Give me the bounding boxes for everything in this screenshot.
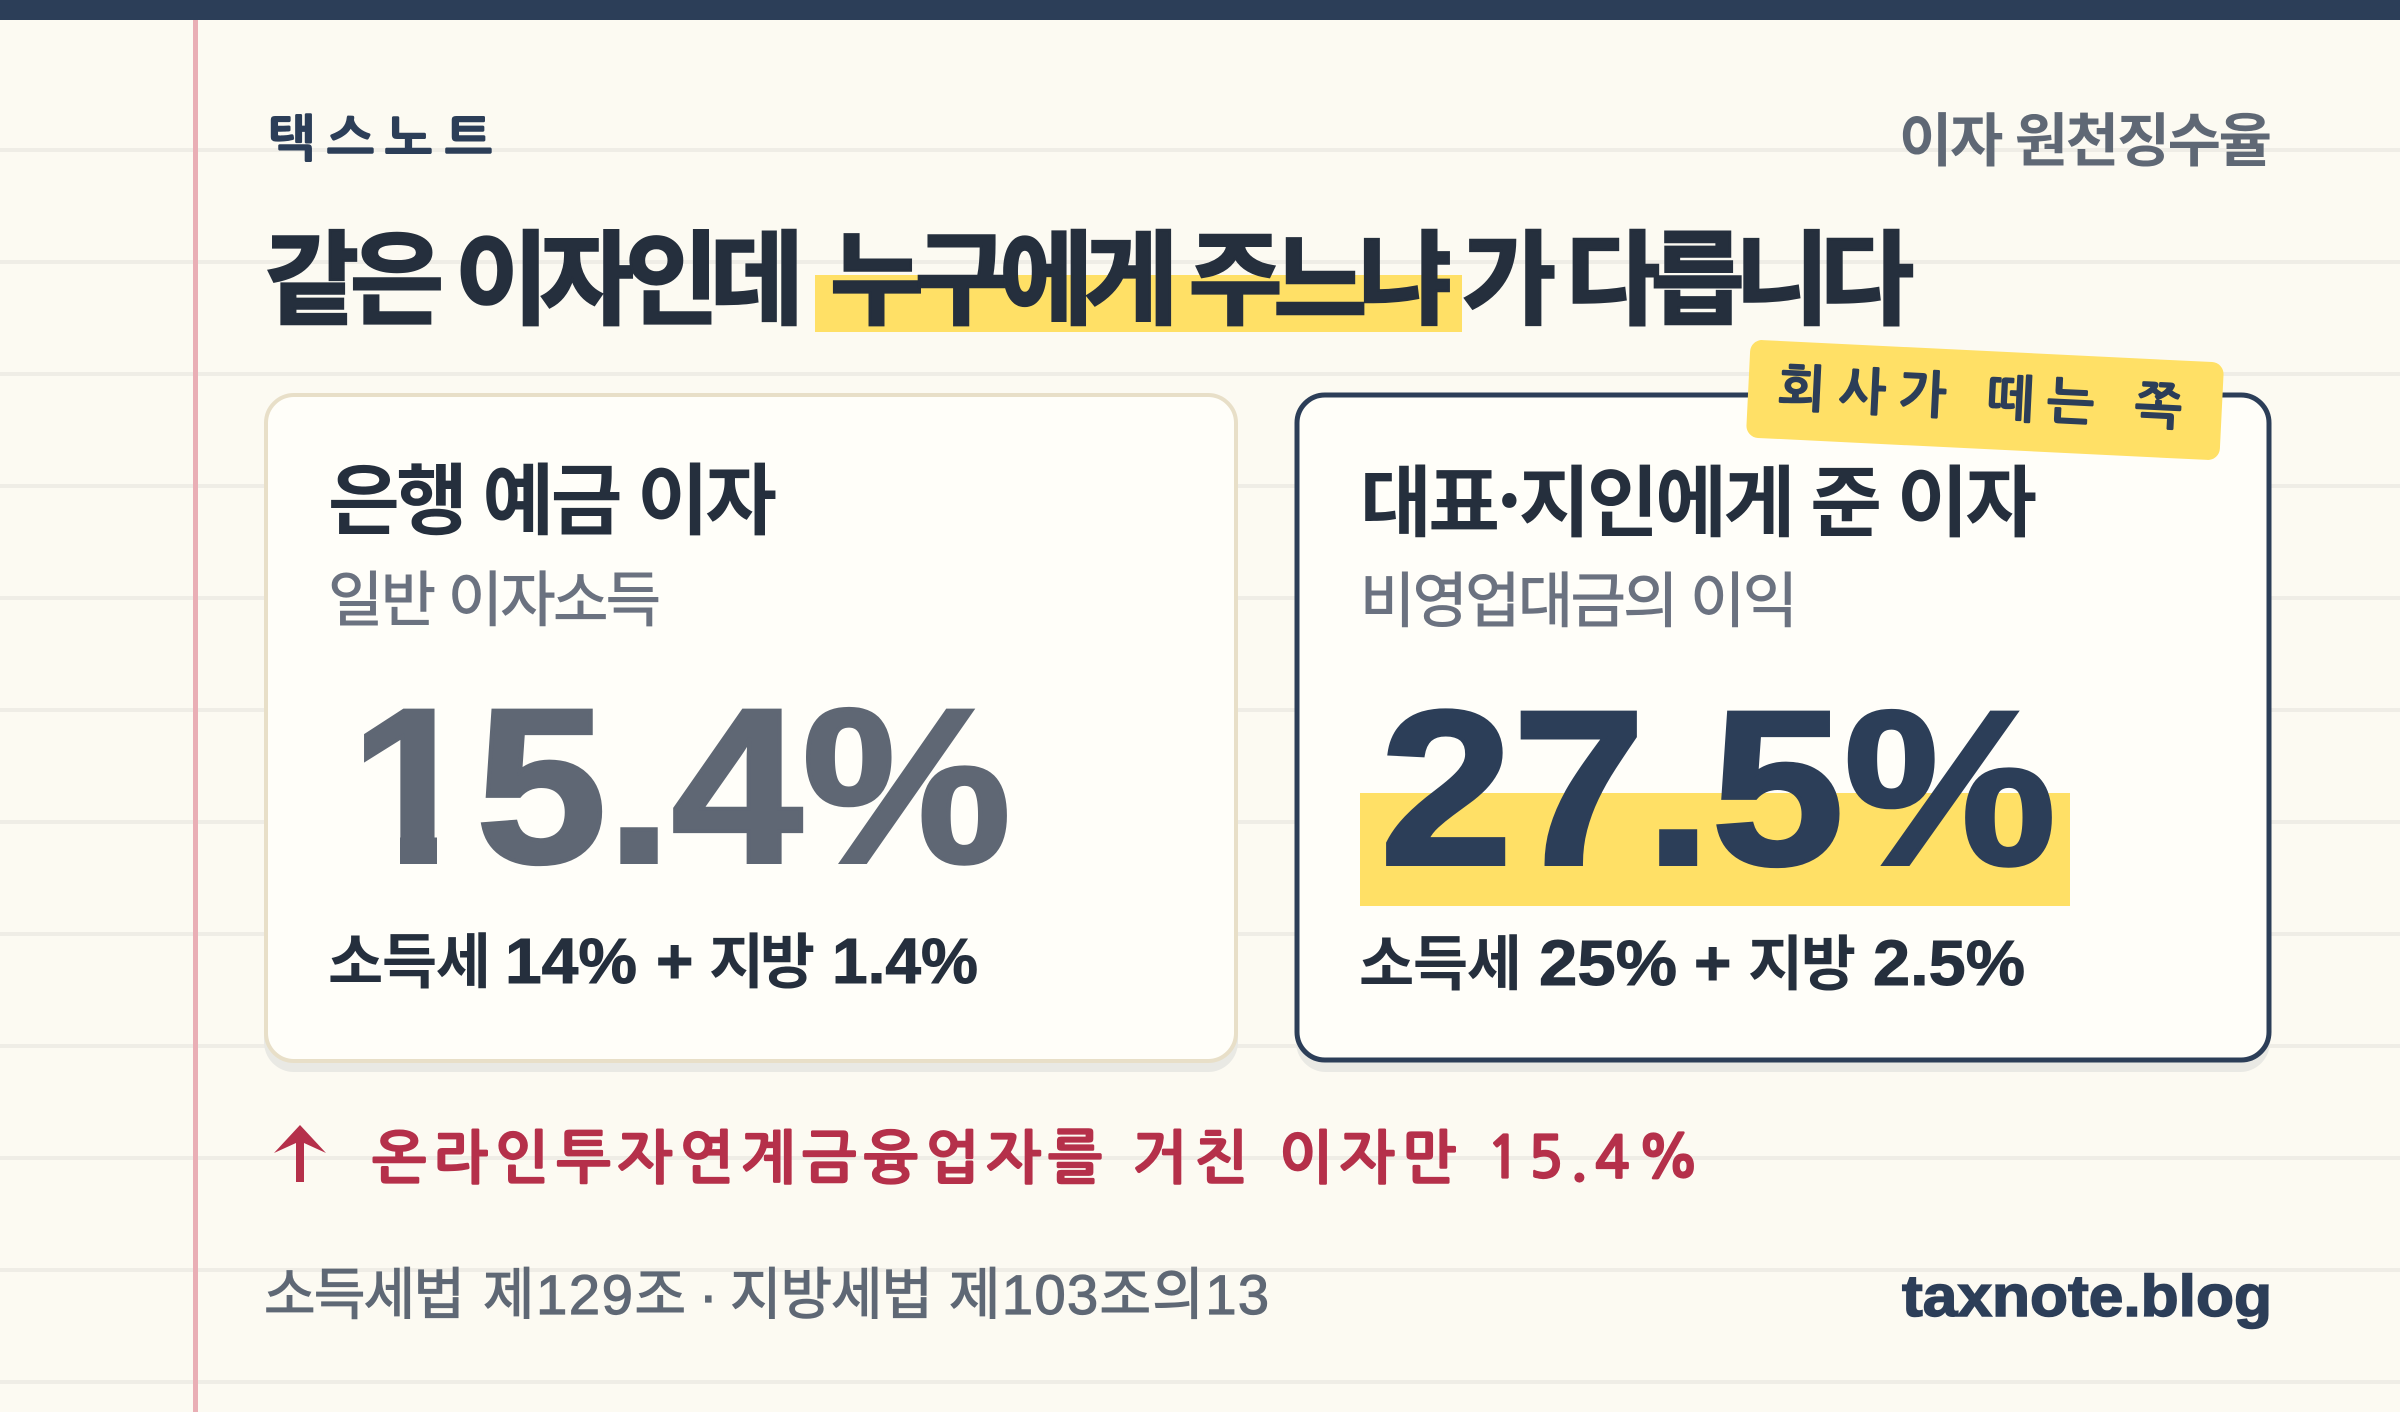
legal source: 제129조 xyxy=(483,1263,686,1326)
card heading: 대표·지인에게 준 이자 xyxy=(1360,441,2037,553)
title: 같은 이자인데 xyxy=(265,199,804,346)
legal source: 제103조의13 xyxy=(949,1263,1269,1326)
panel: bank deposit interest xyxy=(264,395,1238,1072)
brand: 택스노트: 스 xyxy=(327,115,374,164)
breakdown: 2.5% xyxy=(1873,927,2025,999)
legal source: 소득세법 xyxy=(264,1263,465,1326)
card subheading: 비영업대금의 이익 xyxy=(1360,553,1798,640)
brand: 택스노트: 노 xyxy=(385,115,432,164)
brand: 택스노트 xyxy=(268,113,492,164)
breakdown: + xyxy=(1694,927,1731,999)
legal source xyxy=(264,1263,1269,1326)
breakdown xyxy=(328,914,978,1001)
card shadow xyxy=(1296,402,2270,1072)
brand: 택스노트: 택 xyxy=(268,113,315,164)
panel: interest paid to CEO or acquaintance xyxy=(1296,395,2270,1072)
breakdown xyxy=(1359,916,2025,1003)
title: 누구에게 주느냐 xyxy=(830,199,1452,346)
title highlight xyxy=(815,275,1462,332)
rate: 1 xyxy=(351,663,473,909)
sticky tag: company withholding side: 회사가 떼는 쪽 xyxy=(1777,362,2183,433)
card heading: 은행 예금 이자 xyxy=(328,439,777,551)
rate: 27.5% xyxy=(1380,665,2056,911)
topic label: 이자 원천징수율 xyxy=(1899,94,2272,178)
title xyxy=(265,199,1914,346)
title: 가 다릅니다 xyxy=(1462,199,1914,346)
brand: 택스노트: 트 xyxy=(445,115,492,164)
card subheading: 일반 이자소득 xyxy=(328,552,661,639)
breakdown: 소득세 xyxy=(1359,916,1522,1003)
card body xyxy=(266,395,1236,1061)
breakdown: 지방 xyxy=(1748,916,1856,1003)
legal source: · xyxy=(699,1263,718,1326)
breakdown: 지방 xyxy=(709,914,815,1001)
rate: 5.4% xyxy=(476,663,1011,909)
breakdown: 25% xyxy=(1539,927,1677,999)
breakdown: 1.4% xyxy=(832,925,978,997)
breakdown: 14% xyxy=(505,925,637,997)
rate highlight xyxy=(1360,793,2070,906)
card body xyxy=(1297,395,2269,1060)
notebook margin line xyxy=(193,20,198,1412)
legal source: 지방세법 xyxy=(730,1263,933,1326)
breakdown: + xyxy=(656,925,693,997)
note arrow xyxy=(274,1125,326,1182)
note text: 온라인투자연계금융업자를 거친 이자만 15.4% xyxy=(372,1128,1700,1187)
sticky tag: company withholding side xyxy=(1746,339,2224,461)
top navy bar xyxy=(0,0,2400,20)
site url: taxnote.blog xyxy=(1902,1264,2272,1329)
card shadow xyxy=(264,402,1238,1072)
breakdown: 소득세 xyxy=(328,914,491,1001)
